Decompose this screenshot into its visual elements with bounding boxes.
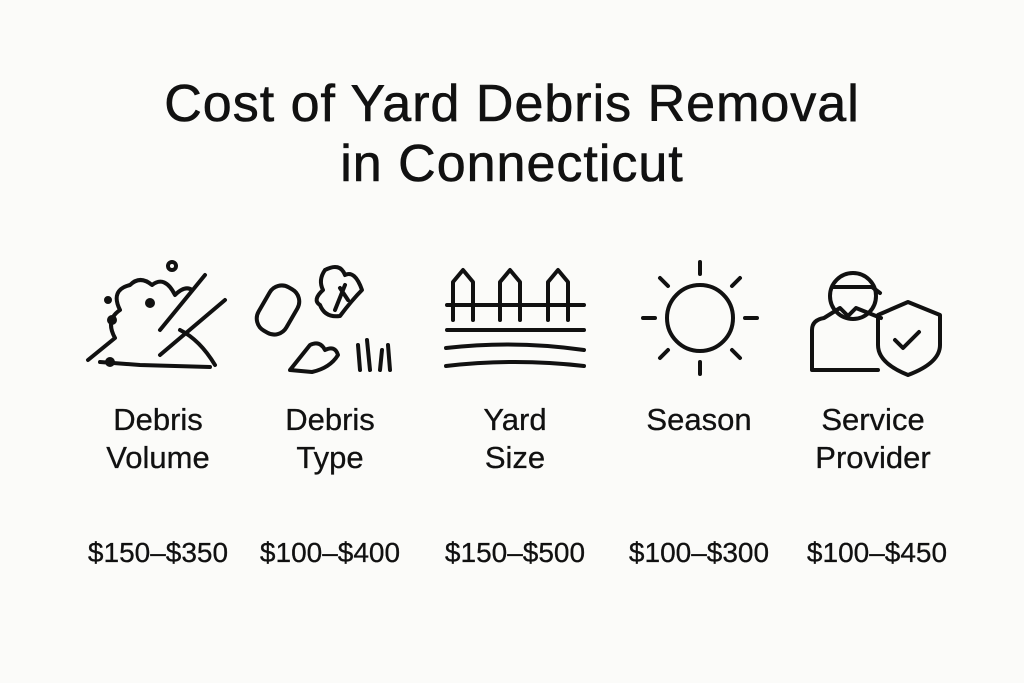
- label: Yard Size: Size: [485, 440, 545, 475]
- label: Service Provider: [815, 402, 931, 475]
- price: season: $100–$300: [629, 537, 769, 568]
- label: Debris Volume: Debris: [113, 402, 203, 437]
- label: Debris Type: Debris: [285, 402, 375, 437]
- label: Yard Size: [483, 402, 547, 475]
- label: Debris Type: [285, 402, 375, 475]
- icon: fence: [446, 270, 584, 366]
- icon: sun: [643, 262, 757, 374]
- price: provider: $100–$450: [807, 537, 947, 568]
- label: Service Provider: Service: [821, 402, 925, 437]
- icon: provider: [812, 273, 940, 375]
- icon: debris type: [252, 267, 390, 372]
- label: Service Provider: Provider: [815, 440, 931, 475]
- title: [164, 75, 860, 193]
- price: type: $100–$400: [260, 537, 400, 568]
- title: Cost of Yard Debris Removal: [164, 75, 860, 133]
- label: Debris Type: Type: [296, 440, 364, 475]
- price: yard: $150–$500: [445, 537, 585, 568]
- label: Debris Volume: Volume: [106, 440, 210, 475]
- label: Season: Season: [646, 402, 752, 437]
- label: Yard Size: Yard: [483, 402, 547, 437]
- title: in Connecticut: [340, 135, 684, 193]
- label: Debris Volume: [106, 402, 210, 475]
- icon: debris pile: [88, 262, 225, 367]
- price: volume: $150–$350: [88, 537, 228, 568]
